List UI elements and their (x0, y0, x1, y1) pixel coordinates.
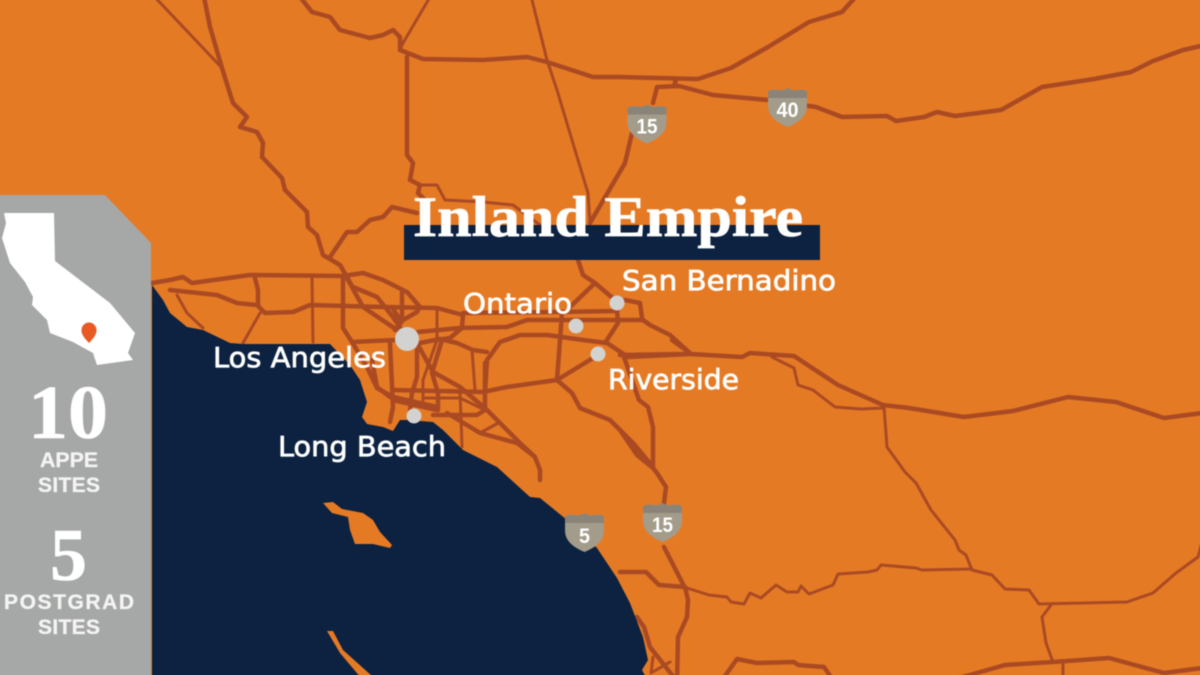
side panel (0, 195, 151, 675)
ocean (152, 285, 650, 675)
interstate shield: 15 north (628, 104, 666, 144)
stat: 10 APPE sites: SITES (38, 474, 100, 497)
interstate shield: 15 north: 15 (636, 116, 658, 138)
stat: 5 postgrad sites (4, 515, 134, 639)
stat: 10 APPE sites: APPE (40, 449, 98, 472)
title: Inland Empire (413, 186, 803, 249)
island: San Clemente (327, 631, 382, 675)
city label: Long Beach: Long Beach (278, 431, 446, 463)
interstate shield: 40: 40 (776, 99, 798, 122)
island: Santa Catalina (323, 502, 392, 548)
stat: 5 postgrad sites: SITES (38, 616, 100, 639)
title bar (404, 225, 820, 260)
city dot: Long Beach (406, 408, 422, 424)
city dot: Riverside (590, 346, 606, 362)
icon: California map with location pin (2, 213, 135, 365)
city label: Los Angeles: Los Angeles (213, 342, 386, 374)
interstate shield: 5: 5 (579, 525, 590, 548)
stat: 5 postgrad sites: 5 (50, 515, 87, 597)
city label: Riverside: Riverside (608, 364, 739, 396)
interstate shield: 5 (565, 513, 604, 552)
city dot: Los Angeles (395, 327, 419, 351)
stat: 10 APPE sites (28, 371, 108, 497)
city dot: Ontario (568, 318, 584, 334)
stat: 5 postgrad sites: POSTGRAD (4, 591, 134, 614)
interstate shield: 40 (768, 88, 807, 127)
interstate shield: 15 south: 15 (652, 514, 673, 537)
city label: Ontario: Ontario (463, 288, 572, 320)
stat: 10 APPE sites: 10 (28, 371, 108, 455)
city label: San Bernadino: San Bernadino (622, 265, 836, 297)
city dot: San Bernadino (610, 296, 624, 310)
interstate shield: 15 south (643, 503, 682, 542)
